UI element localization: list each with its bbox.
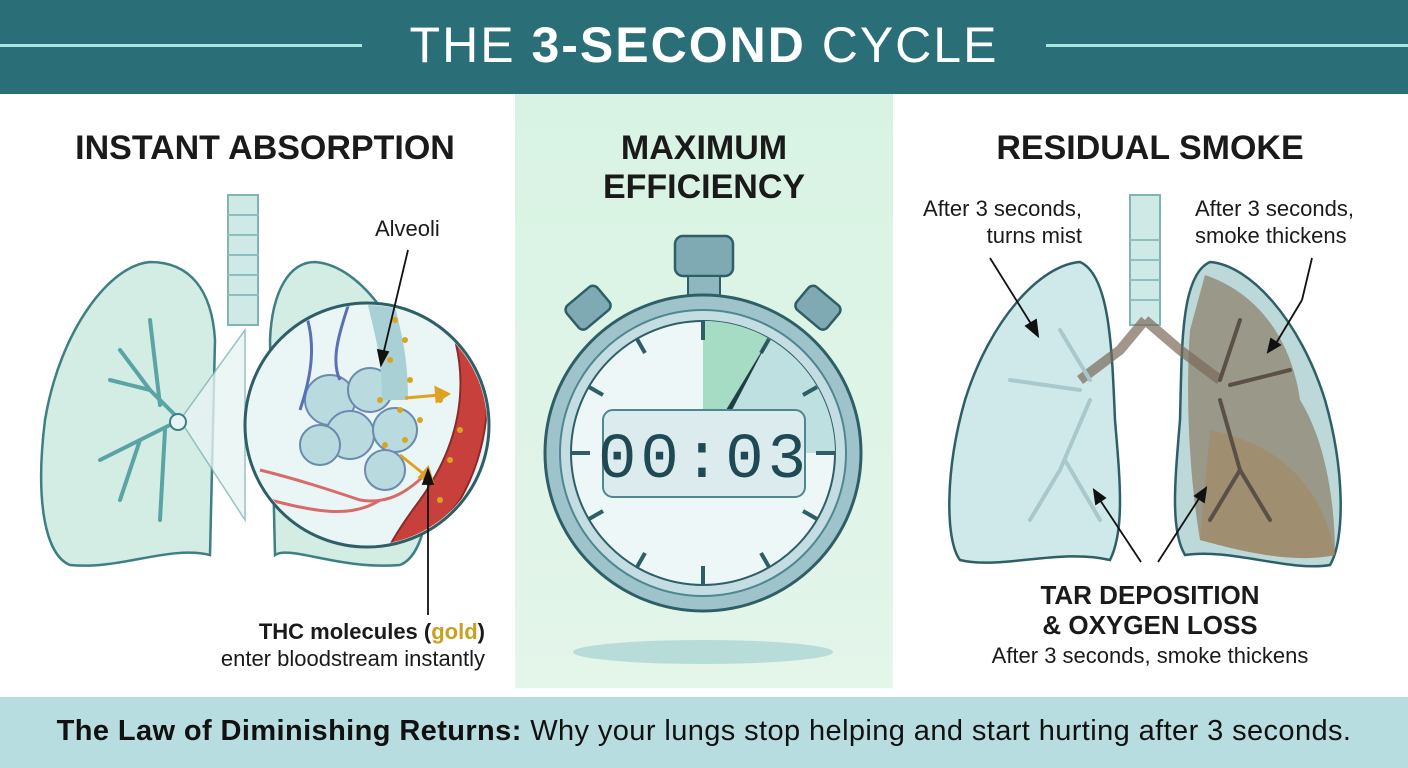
heading: maximum efficiency: MAXIMUM: [621, 129, 787, 167]
label: turns mist: turns mist: [987, 223, 1082, 248]
label: smoke thickens: smoke thickens: [1195, 223, 1347, 248]
heading: maximum efficiency: [603, 129, 805, 206]
label: tar deposition: [992, 580, 1308, 668]
title: THE 3-SECOND CYCLE: [410, 17, 998, 73]
header banner: [0, 0, 1408, 94]
header line right: [1046, 44, 1408, 47]
label: tar deposition: After 3 seconds, smoke thickens: [992, 643, 1308, 668]
label: smoke thickens: After 3 seconds,: [1195, 196, 1354, 221]
footer banner: [0, 697, 1408, 768]
heading: residual smoke: RESIDUAL SMOKE: [996, 129, 1304, 167]
heading: maximum efficiency: EFFICIENCY: [603, 168, 805, 206]
illustration: stopwatch: [545, 236, 861, 664]
header line left: [0, 44, 362, 47]
footer text: The Law of Diminishing Returns: Why your lungs stop helping and start hurting after 3 seconds.: [57, 715, 1351, 747]
label: turns mist: [923, 196, 1082, 248]
label: tar deposition: & OXYGEN LOSS: [1042, 610, 1258, 640]
label: THC molecules: THC molecules (gold): [259, 619, 485, 644]
illustration: absorption lungs: [41, 195, 489, 615]
label: alveoli: Alveoli: [375, 216, 440, 241]
magnified alveoli circle: [244, 302, 490, 548]
heading: instant absorption: INSTANT ABSORPTION: [75, 129, 455, 167]
label: THC molecules: enter bloodstream instantly: [221, 646, 485, 671]
label: smoke thickens: [1195, 196, 1354, 248]
panel: middle background: [515, 94, 893, 688]
illustration: stopwatch: 00:03: [598, 425, 810, 497]
callout arrows: [378, 250, 433, 615]
arrows: [990, 258, 1312, 562]
label: turns mist: After 3 seconds,: [923, 196, 1082, 221]
illustration: smoke lungs: [949, 195, 1341, 566]
digital display: [603, 410, 805, 497]
label: THC molecules: [221, 619, 485, 671]
label: tar deposition: TAR DEPOSITION: [1040, 580, 1260, 610]
